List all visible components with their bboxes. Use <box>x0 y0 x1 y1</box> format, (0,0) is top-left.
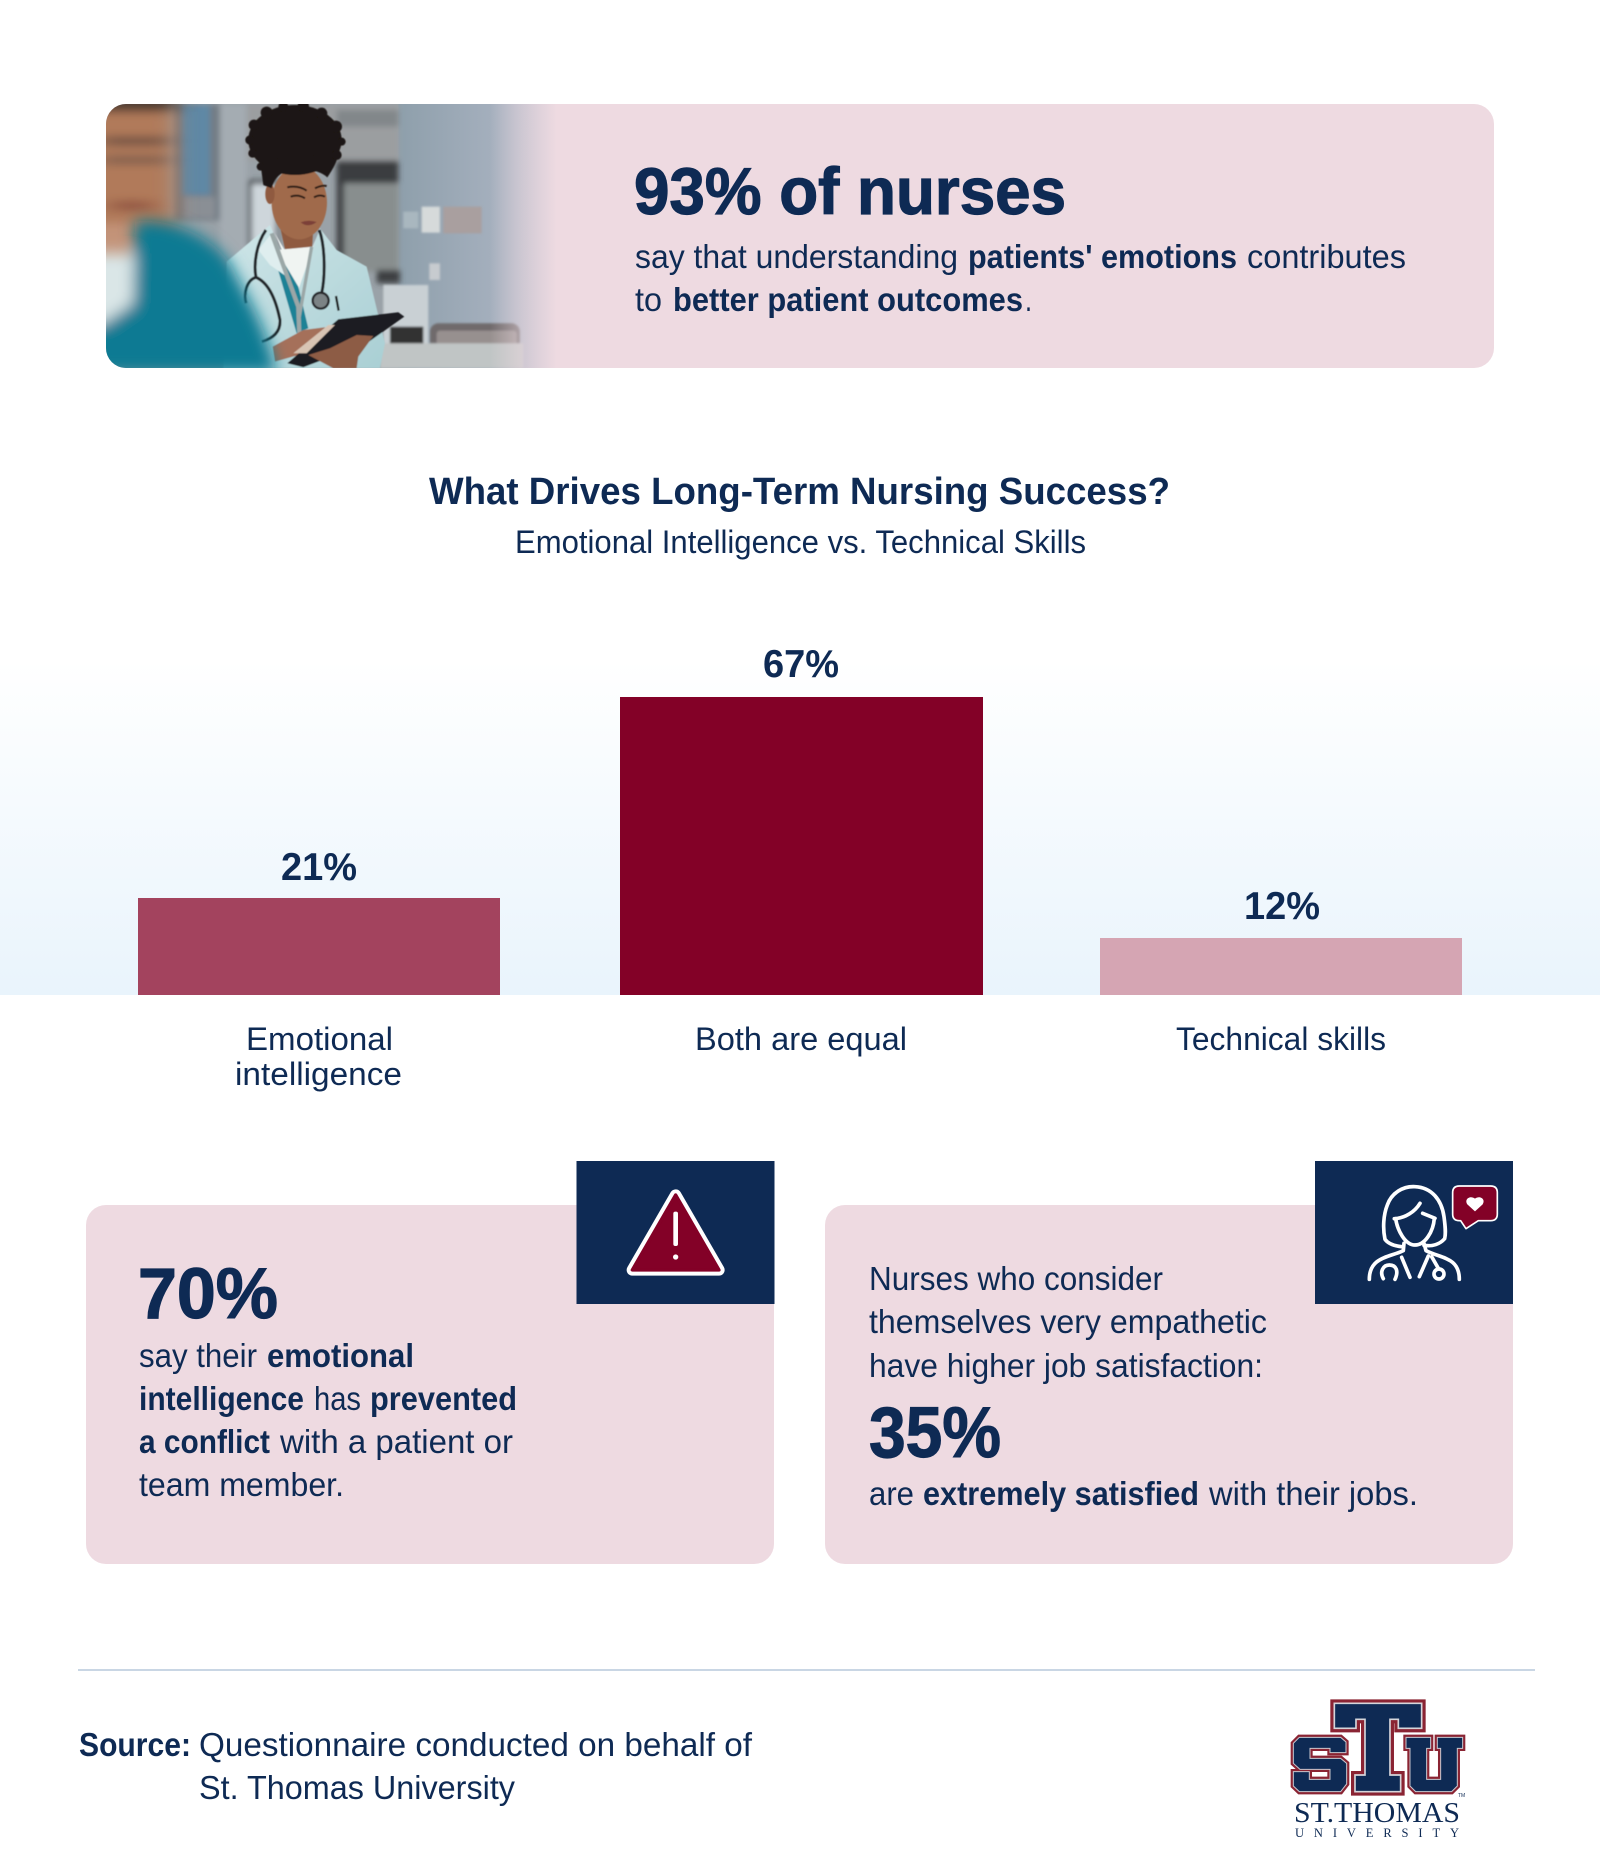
bar: emotional intelligence 21%: 21% <box>281 846 357 889</box>
bar: both are equal 67%: Both are equal <box>695 1021 907 1057</box>
text: satisfaction statement <box>869 1475 1418 1512</box>
text: conflict statement: emotional <box>267 1337 414 1374</box>
text: satisfaction statement: extremely satisfied <box>923 1475 1199 1512</box>
text: conflict statement <box>139 1337 517 1503</box>
headline: 93% of nurses: 93% of nurses <box>634 154 1066 228</box>
panel: 35% satisfaction card <box>825 1161 1513 1564</box>
bar: both are equal 67%: 67% <box>763 643 839 686</box>
text: empathetic nurses intro: themselves very empathetic <box>869 1303 1267 1340</box>
text: satisfaction statement: with their jobs. <box>1208 1475 1418 1512</box>
text: banner statement: to <box>635 281 662 318</box>
bar: technical skills 12%: Technical skills <box>1176 1021 1386 1057</box>
text: banner statement: . <box>1025 281 1032 318</box>
panel: 70% conflict card <box>86 1161 774 1564</box>
text: source <box>79 1726 753 1806</box>
logo: St. Thomas University: ST.THOMAS <box>1294 1797 1460 1829</box>
text: conflict statement: prevented <box>370 1380 517 1417</box>
bar: emotional intelligence 21%: intelligence <box>235 1056 402 1092</box>
text: banner statement: contributes <box>1247 238 1406 275</box>
bar: technical skills 12%: 12% <box>1244 885 1320 928</box>
logo: St. Thomas University: TM <box>1458 1793 1465 1799</box>
text: conflict statement: has <box>314 1380 361 1417</box>
stat: 35%: 35% <box>869 1394 1001 1473</box>
stat: 70%: 70% <box>138 1255 278 1334</box>
text: banner statement: patients' emotions <box>968 238 1237 275</box>
text: source: St. Thomas University <box>199 1769 515 1806</box>
text: empathetic nurses intro <box>869 1260 1267 1384</box>
panel: hero banner <box>83 97 1494 373</box>
text: empathetic nurses intro: have higher job satisfaction: <box>869 1347 1263 1384</box>
text: conflict statement: team member. <box>139 1466 344 1503</box>
text: source: Source: <box>79 1726 191 1763</box>
icon: nurse with heart speech bubble <box>1315 1161 1513 1304</box>
text: banner statement: better patient outcomes <box>673 281 1023 318</box>
icon: warning triangle <box>576 1161 774 1304</box>
text: source: Questionnaire conducted on behalf of <box>199 1726 753 1763</box>
logo: St. Thomas University: UNIVERSITY <box>1295 1826 1459 1840</box>
text: banner statement: say that understanding <box>635 238 958 275</box>
text: conflict statement: intelligence <box>139 1380 304 1417</box>
photo: nurse with tablet <box>106 104 548 368</box>
text: conflict statement: say their <box>139 1337 257 1374</box>
text: satisfaction statement: are <box>869 1475 914 1512</box>
text: conflict statement: with a patient or <box>279 1423 513 1460</box>
bar chart <box>0 643 1600 1092</box>
heading: chart title: What Drives Long-Term Nursing Success? <box>429 471 1170 513</box>
bar: emotional intelligence 21%: Emotional <box>246 1021 393 1057</box>
logo: St. Thomas University <box>1293 1703 1465 1840</box>
bar: emotional intelligence 21% <box>138 846 500 1092</box>
text: empathetic nurses intro: Nurses who consider <box>869 1260 1163 1297</box>
text: conflict statement: a conflict <box>139 1423 270 1460</box>
text: chart subtitle: Emotional Intelligence vs. Technical Skills <box>515 524 1086 560</box>
text: banner statement <box>635 238 1406 318</box>
bar: technical skills 12% <box>1100 885 1462 1057</box>
bar: both are equal 67% <box>620 643 983 1057</box>
